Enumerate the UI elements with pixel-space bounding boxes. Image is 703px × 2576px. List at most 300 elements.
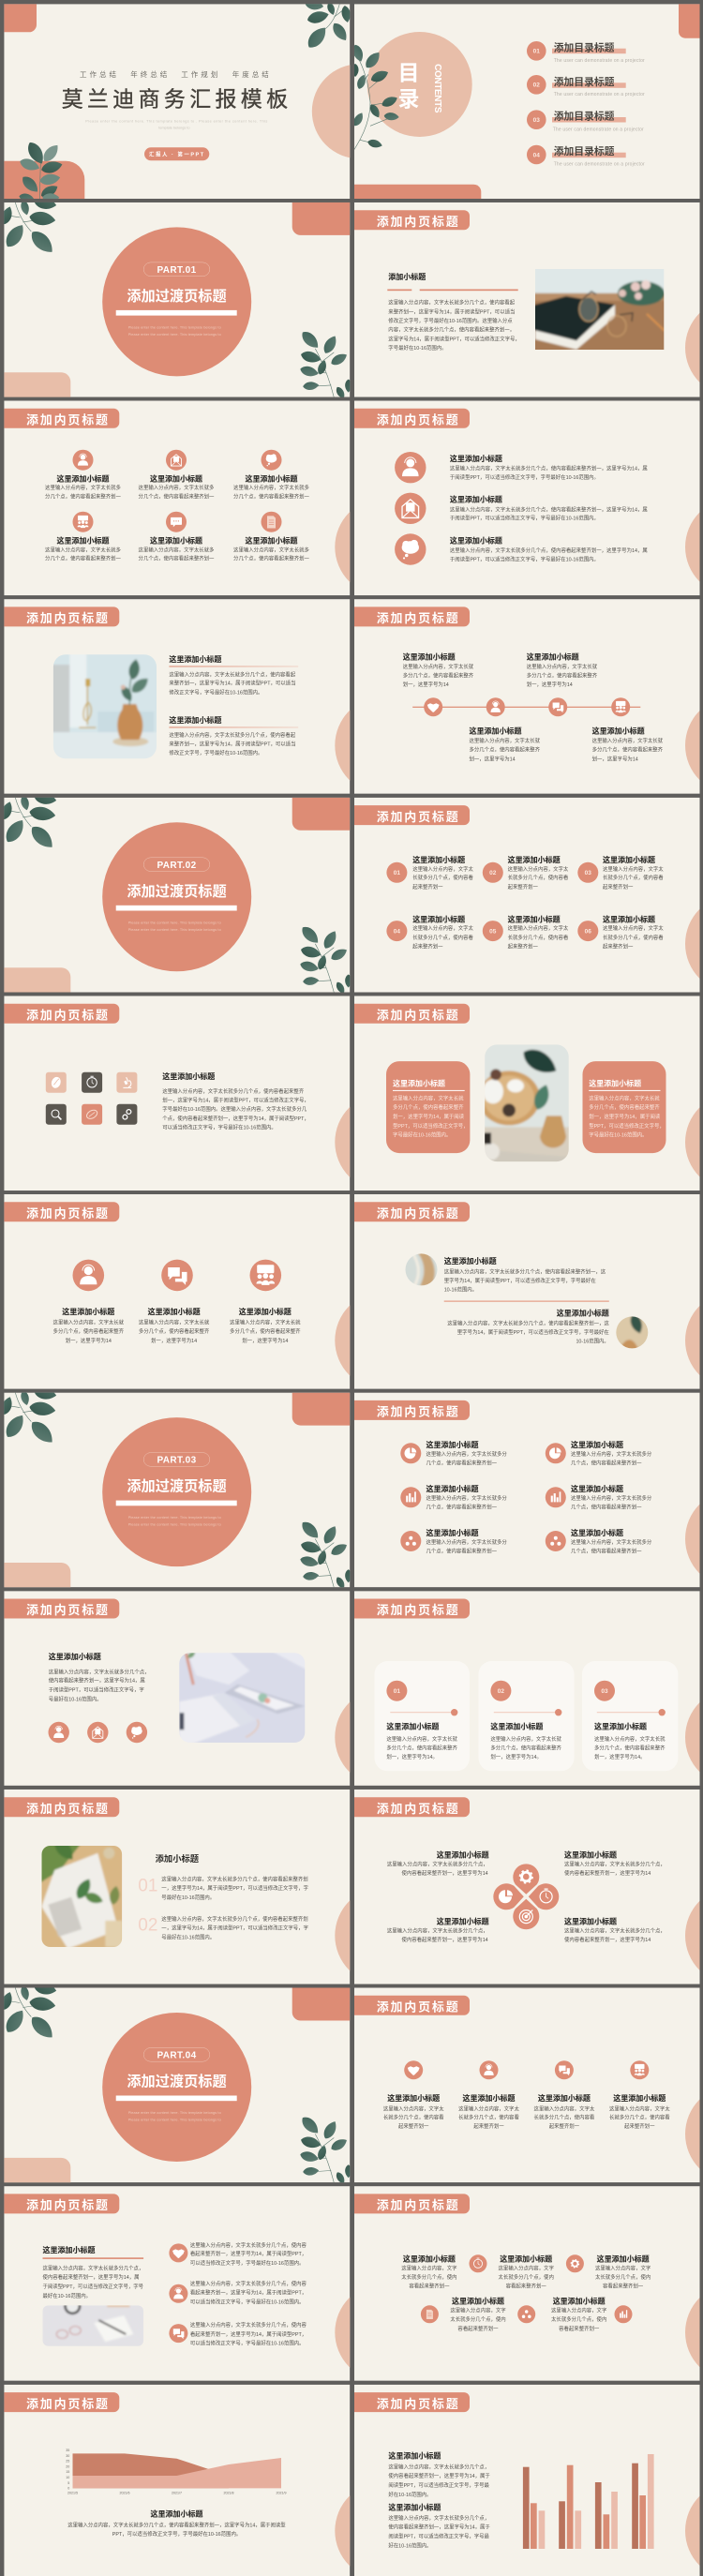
heading tab: 添加内页标题 [377,1603,460,1617]
item 06 [577,914,664,950]
text lower left: 这里输入分点内容，文字太长就多分几个点， [387,1927,488,1935]
column 2 [458,2060,519,2130]
white bar [116,310,237,316]
item text 4: 容看起来整齐划一 [457,2325,499,2332]
heading tab [4,1797,119,1817]
text bottom 2: 这里输入分点内容，文字太长就 [592,737,664,744]
text block 1: 好在10-16范围内。 [388,2491,432,2498]
contents item 01: The user can demonstrate on a projector [554,58,645,64]
heading tab [354,409,470,428]
item 05: 这里添加小标题 [508,914,561,923]
heading tab [4,607,119,626]
text block lower: 这里添加小标题 [557,1308,609,1317]
heading tab: 添加内页标题 [377,1206,460,1221]
icon: leaves top left [0,1981,57,2043]
heading tab [354,2194,470,2213]
heading tab [354,1996,470,2015]
text upper right: 使内容看起来整齐划一，这里字号为14 [564,1869,651,1877]
icon: nodes [517,2305,535,2323]
card 01: 这里添加小标题 [386,1721,439,1730]
item 06: 起来整齐划一 [603,942,634,950]
row 3: 这里添加小标题 [450,535,502,545]
item 05: 05 [489,928,497,935]
item text 1 [401,2254,457,2289]
part label [143,1453,210,1466]
text block 2: 修改正文字号，字号最好在10-16范围内。 [169,749,262,756]
bar chart [523,2454,654,2549]
column 3: 这里添加小标题 [239,1307,292,1316]
icon: chart [615,2305,632,2323]
text top 2 [527,652,598,688]
column 2: 划一，这里字号为14 [151,1337,197,1344]
item 5 [139,512,215,562]
heading tab: 添加内页标题 [26,1008,110,1022]
text block lower: 这里输入分点内容，文字太长就多分几个点，使内容看起来整齐划一，这 [447,1319,609,1326]
item 02 [483,855,569,891]
text block lower: 10-16范围内。 [576,1337,609,1344]
item 1: 这里输入分点内容，文字太长就多 [45,484,122,491]
icon: leaves bottom right [299,1519,352,1590]
item 2 [139,450,215,500]
item text 3: 容看起来整齐划一 [603,2282,644,2289]
column 2: 这里添加小标题 [463,2093,516,2103]
row 3: 这里输入分点内容，文字太长就多分几个点，使内容 [190,2321,307,2329]
body text: 于阅读型PPT，可以适当修改正文字号，字号 [42,2283,144,2290]
corner tab bottom left [4,967,70,993]
card left: 字号最好在10-16范围内。 [393,1131,451,1138]
item right 3: 这里添加小标题 [571,1528,623,1537]
text bottom 2: 多分几个点，使内容看起来整齐 [592,746,664,754]
card right: 型PPT，可以适当修改正文字号， [589,1122,665,1130]
column 1: 这里添加小标题 [387,2093,440,2103]
contents item 03: 添加目录标题 [554,110,615,123]
text bottom 1: 这里添加小标题 [469,726,521,736]
text 01: 一，这里字号为14，属于阅读型PPT，可以适当修改正文字号，字 [161,1884,308,1892]
item 04: 04 [394,928,400,935]
text 01: 号最好在10-16范围内。 [161,1894,215,1901]
icon: leaves top right [306,4,351,48]
body text: 这里输入分点内容，文字太长就多分几个点， [49,1668,150,1675]
text block 2: 好在10-16范围内。 [388,2541,432,2549]
column 3 [230,1260,301,1344]
item right 3: 几个点，使内容看起来整齐划一 [571,1547,642,1554]
contents item 02 [527,75,645,97]
text lower right [564,1917,666,1943]
item 6 [233,512,310,562]
item text 5: 这里输入分点内容，文字 [551,2306,606,2314]
rule [43,2257,143,2259]
card 02 [478,1661,574,1771]
photo: open book on bed [177,1650,307,1745]
item 05: 起来整齐划一 [508,942,539,950]
area chart: 20 [66,2464,69,2468]
item 02: 这里添加小标题 [508,855,561,864]
panel: part 03 transition [0,1386,352,1590]
body text: 可以适当修改正文字号，字号最好在10-16范围内。 [162,1123,277,1131]
item text 1: 这里添加小标题 [403,2254,456,2263]
area chart: 15 [66,2470,69,2474]
panel: four columns [354,1987,703,2182]
item 06: 这里添加小标题 [603,914,655,923]
heading tab [4,2194,119,2213]
text top 2: 这里输入分点内容，文字太长就 [527,663,598,670]
text upper right [564,1850,666,1877]
text top 1: 多分几个点，使内容看起来整齐 [403,671,474,679]
text block upper [444,1256,606,1293]
decorative circle right [335,2284,432,2381]
part circle [102,227,251,376]
contents item 03: The user can demonstrate on a projector [553,127,644,133]
body text: 号最好在10-16范围内。 [49,1696,102,1703]
panel: three cards [354,1591,703,1786]
corner tab bottom left [4,161,84,199]
item right 3 [546,1528,652,1554]
row 3: 于阅读型PPT，可以适当修改正文字号，字号最好在10-16范围内。 [450,555,599,562]
item text 5 [551,2296,606,2332]
corner tab top right [679,4,699,38]
item text 4: 这里输入分点内容，文字 [450,2306,506,2314]
heading tab [4,1004,119,1024]
item left 2: 这里添加小标题 [426,1484,478,1493]
panel: five staggered items [354,2186,703,2381]
item text 2: 容看起来整齐划一 [506,2282,546,2289]
item 02: 长就多分几个点，使内容看 [508,874,569,881]
column 1: 多分几个点，使内容看起来整齐 [53,1327,125,1335]
text bottom 1 [469,726,541,762]
item left 3: 这里添加小标题 [426,1528,478,1537]
item right 2: 这里添加小标题 [571,1484,623,1493]
text block 2: 这里输入分点内容，文字太长就多分几个点， [388,2514,489,2522]
part label: PART.01 [157,265,197,276]
text block 1: 这里添加小标题 [388,2451,441,2461]
text block 2: 这里添加小标题 [169,715,221,725]
area chart: 10 [66,2476,69,2479]
item 5: 这里输入分点内容，文字太长就多 [139,546,215,553]
panel: part 01 transition [0,196,352,400]
decorative circle right [335,696,432,794]
chart caption heading: 这里添加小标题 [150,2509,202,2519]
text block upper: 这里添加小标题 [444,1256,497,1266]
column 3 [534,2060,595,2130]
card 03 [582,1661,678,1771]
contents item 04: The user can demonstrate on a projector [554,162,645,168]
text 02: 号最好在10-16范围内。 [161,1933,215,1940]
panel: two round photos [354,1194,703,1389]
card 03: 这里添加小标题 [594,1721,647,1730]
decorative circle right [335,512,351,583]
column 3: 长就多分几个点，使内容看 [534,2114,595,2121]
item 3: 这里输入分点内容，文字太长就多 [233,484,310,491]
part label [143,2047,210,2061]
column 1: 划一，这里字号为14 [66,1337,112,1344]
text bottom 1: 多分几个点，使内容看起来整齐 [469,746,541,754]
item 4: 分几个点，使内容看起来整齐划一 [45,555,122,562]
heading tab: 添加内页标题 [377,215,460,229]
presenter pill: 汇报人 · 第一PPT [149,150,205,157]
item 02: 这里输入分点内容，文字太 [508,865,569,873]
decorative circle right [335,1887,432,1984]
text block 1: 阅读型PPT，可以适当修改正文字号，字号最 [388,2481,490,2489]
english caption: Please enter the content here. This template belongs to . Please enter the content here. This [85,119,267,123]
row 2: 这里输入分点内容，文字太长就多分几个点，使内容看起来整齐划一，这里字号为14，属 [450,505,648,513]
text bottom 2 [592,726,664,762]
corner tab bottom left [4,2158,70,2182]
body text: 于阅读型PPT，可以适当修改正文字号，字 [49,1686,144,1694]
body text: 使内容看起来整齐划一，这里字号为14，属 [49,1677,145,1685]
icon: leaves branch [354,45,399,150]
item text 5: 太长就多分几个点，使内 [551,2315,606,2323]
decorative circle right [685,1292,703,1389]
body text: 个点，使内容看起来整齐划一，这里字号为14，属于阅读型PPT， [162,1115,309,1122]
subheading: 这里添加小标题 [43,2245,95,2254]
column 4: 这里添加小标题 [613,2093,666,2103]
corner tab top right [292,798,350,831]
part label: PART.02 [157,861,197,871]
row 3: 这里输入分点内容，文字太长就多分几个点，使内容看起来整齐划一，这里字号为14，属 [450,547,648,554]
row 1: 这里添加小标题 [450,454,502,463]
contents item 02: 添加目录标题 [554,75,615,88]
area chart: 0 [67,2487,69,2491]
text lower left: 这里添加小标题 [437,1917,489,1926]
decorative circle right [685,1688,703,1786]
contents heading: 目 [397,61,420,85]
body text: 使内容看起来整齐划一，这里字号为14，属 [42,2273,140,2281]
item 4: 这里输入分点内容，文字太长就多 [45,546,122,553]
column 2: 多分几个点，使内容看起来整齐 [139,1327,210,1335]
row 1 [395,452,648,483]
body text: 内容，文字太长就多分几个点，使内容看起来整齐划一， [388,326,515,334]
item 3: 这里添加小标题 [246,473,298,483]
photo: round two [614,1312,651,1352]
heading tab: 添加内页标题 [26,1206,110,1221]
item 06: 06 [585,928,591,935]
item 4 [45,512,122,562]
panel: three big icons [4,1194,432,1389]
heading tab: 添加内页标题 [26,611,110,625]
subheading: 添加小标题 [156,1853,200,1864]
column 3: 划一，这里字号为14 [242,1337,288,1344]
part label [143,858,210,872]
body text: 字号最好在10-16范围内。 [388,344,447,352]
area chart: 2021/6 [119,2491,129,2494]
heading tab: 添加内页标题 [377,1405,460,1419]
text 02: 一，这里字号为14，属于阅读型PPT，可以适当修改正文字号，字 [161,1924,308,1931]
decorative circle right [685,2085,703,2182]
petal diagram [493,1864,559,1929]
text top 2: 划一，这里字号为14 [527,681,573,688]
item left 1: 几个点，使内容看起来整齐划一 [426,1459,498,1466]
column 1: 长就多分几个点，使内容看 [383,2114,444,2121]
icon: leaves top left [0,791,57,852]
photo: tea tray [478,1042,571,1164]
card 03: 划一，这里字号为14。 [594,1753,646,1760]
item text 1: 这里输入分点内容，文字 [401,2264,457,2271]
contents item 01: 01 [533,49,540,55]
contents heading: 录 [397,86,420,111]
item text 1: 太长就多分几个点，使内 [401,2273,457,2281]
icon: document [421,2305,439,2323]
heading tab: 添加内页标题 [377,1802,460,1816]
icon square 1 [46,1072,67,1093]
row 2: 看起来整齐划一，这里字号为14，属于阅读型PPT， [190,2288,307,2296]
text top 2: 这里添加小标题 [527,652,579,662]
panel: four petal diagram [354,1790,703,1984]
text block 1: 这里添加小标题 [169,654,221,664]
card left: 多分几个点，使内容看起来整齐 [393,1103,464,1111]
presenter pill [144,147,209,160]
item right 3: 这里输入分点内容，文字太长就多分 [571,1538,652,1546]
card right: 这里输入分点内容，文字太长就 [589,1094,660,1101]
text block 2: 这里输入分点内容，文字太长就多分几个点，使内容看起 [169,731,296,739]
heading tab [4,2392,119,2412]
text block 1: 修改正文字号，字号最好在10-16范围内。 [169,689,262,696]
area chart [66,2449,287,2494]
column 3: 多分几个点，使内容看起来整齐 [230,1327,301,1335]
item right 2 [546,1484,652,1510]
item text 3 [595,2254,651,2289]
contents item 01: 添加目录标题 [554,40,615,53]
area chart: 2021/8 [223,2491,233,2494]
english caption: Please enter the content here. This template belongs to [128,2111,221,2115]
item 02: 起来整齐划一 [508,883,539,891]
text top 2: 多分几个点，使内容看起来整齐 [527,671,598,679]
card 01: 划一，这里字号为14。 [386,1753,438,1760]
text block upper: 里字号为14，属于阅读型PPT，可以适当修改正文字号，字号最好在 [444,1277,596,1284]
decorative circle right [685,696,703,794]
card left: 型PPT，可以适当修改正文字号， [393,1122,469,1130]
icon: leaves bottom right [299,2114,352,2185]
item 01: 这里添加小标题 [412,855,465,864]
divider [444,1300,609,1302]
decorative circle right [685,2284,703,2381]
icon square 5 [82,1104,102,1125]
item 06: 长就多分几个点，使内容看 [603,934,664,941]
column 2 [139,1260,210,1344]
item 6: 这里添加小标题 [246,536,298,546]
row 3 [169,2321,307,2346]
english caption: template belongs to [158,126,189,129]
panel: timeline [354,599,703,794]
subheading: 添加小标题 [388,272,426,281]
subtitle row: 年度总结 [232,69,272,79]
panel: intro with book photo [354,202,703,397]
decorative circle right [685,895,703,993]
area chart: 2021/7 [172,2491,182,2494]
heading tab [354,1400,470,1420]
corner tab top left [4,4,37,32]
card left: 划一，这里字号为14，属于阅读 [393,1113,465,1120]
text block 1: 来整齐划一，这里字号为14，属于阅读型PPT，可以适当 [169,680,295,687]
row 2: 这里输入分点内容，文字太长就多分几个点，使内容 [190,2280,307,2287]
rule [387,289,518,291]
contents item 02: 02 [533,82,540,89]
column 2: 这里输入分点内容，文字太长就 [139,1318,210,1325]
heading tab [354,1599,470,1618]
body text: 修改正文字号，字号最好在10-16范围内。这里输入分点 [388,317,513,324]
body text: 划一，这里字号为14，属于阅读型PPT，可以适当修改正文字号， [162,1096,309,1103]
text 02: 这里输入分点内容，文字太长就多分几个点，使内容看起来整齐划 [161,1915,308,1923]
icon square 6 [116,1104,137,1125]
icon: leaves bottom right [299,923,352,996]
decorative circle right [685,1887,703,1984]
item text 5: 容看起来整齐划一 [559,2325,600,2332]
chart caption: 这里输入分点内容，文字太长就多分几个点，使内容看起来整齐划一，这里字号为14，属于阅读型 [67,2521,286,2528]
column 1 [383,2060,444,2130]
panel: six small icons two columns [354,1393,703,1588]
heading tab [354,2392,470,2412]
column 4 [609,2060,670,2130]
column 2: 起来整齐划一 [473,2122,504,2130]
icon square 3 [116,1072,137,1093]
contents item 03 [527,110,644,133]
area chart: 25 [66,2460,69,2464]
body text: 这里字号为14，属于阅读型PPT，可以适当修改正文字号， [388,335,520,342]
decorative circle right [685,313,699,382]
area chart: 30 [66,2454,69,2458]
english caption: Please enter the content here. This template belongs to [128,2119,221,2122]
card 01: 多分几个点，使内容看起来整齐 [386,1744,457,1751]
item 04: 这里添加小标题 [412,914,465,923]
text block 1: 这里输入分点内容，文字太长就多分几个点，使内容看起 [169,670,296,678]
subtitle row [80,71,268,78]
item text 3: 太长就多分几个点，使内 [595,2273,651,2281]
text 01: 这里输入分点内容，文字太长就多分几个点，使内容看起来整齐划 [161,1876,308,1883]
item 03: 这里输入分点内容，文字太 [603,865,664,873]
card 01: 01 [394,1688,400,1695]
card 02: 这里输入分点内容，文字太长就 [490,1735,561,1743]
timeline node 4 [611,697,630,716]
card right [583,1061,666,1153]
area chart: 35 [66,2449,69,2452]
row 3: 可以适当修改正文字号，字号最好在10-16范围内。 [190,2339,305,2346]
row 2: 这里添加小标题 [450,495,502,504]
decorative circle right [685,1490,703,1588]
item right 1: 这里添加小标题 [571,1440,623,1449]
icon: person [49,1722,69,1743]
item right 1: 这里输入分点内容，文字太长就多分 [571,1450,652,1458]
column 1: 这里输入分点内容，文字太长就 [53,1318,125,1325]
part circle [102,2013,251,2162]
card left: 这里输入分点内容，文字太长就 [393,1094,464,1101]
heading tab [4,1599,119,1618]
panel: vase photo and text [4,599,432,794]
item 05: 这里输入分点内容，文字太 [508,924,569,932]
item right 1: 几个点，使内容看起来整齐划一 [571,1459,642,1466]
white bar [116,1501,237,1505]
column 3: 起来整齐划一 [549,2122,580,2130]
item 01: 起来整齐划一 [412,883,443,891]
english caption: Please enter the content here. This template belongs to [128,333,221,337]
heading tab [4,1202,119,1221]
transition title: 添加过渡页标题 [127,1478,227,1495]
item 2: 分几个点，使内容看起来整齐划一 [139,492,215,500]
card right: 这里添加小标题 [589,1078,641,1087]
icon: leaves top left [0,1386,57,1447]
item text 4: 太长就多分几个点，使内 [450,2315,506,2323]
item 1: 分几个点，使内容看起来整齐划一 [45,492,122,500]
text block upper: 10-16范围内。 [444,1285,477,1293]
text top 1: 这里添加小标题 [403,652,456,662]
area chart: 2021/9 [277,2491,287,2494]
text block 1 [388,2451,490,2498]
text upper left: 这里输入分点内容，文字太长就多分几个点， [387,1860,488,1867]
contents item 01 [527,40,645,64]
text block 2: 这里添加小标题 [388,2503,441,2512]
row 2: 于阅读型PPT，可以适当修改正文字号，字号最好在10-16范围内。 [450,515,599,522]
heading tab: 添加内页标题 [377,2000,460,2014]
item 3 [233,450,310,500]
text block 2 [169,715,298,756]
